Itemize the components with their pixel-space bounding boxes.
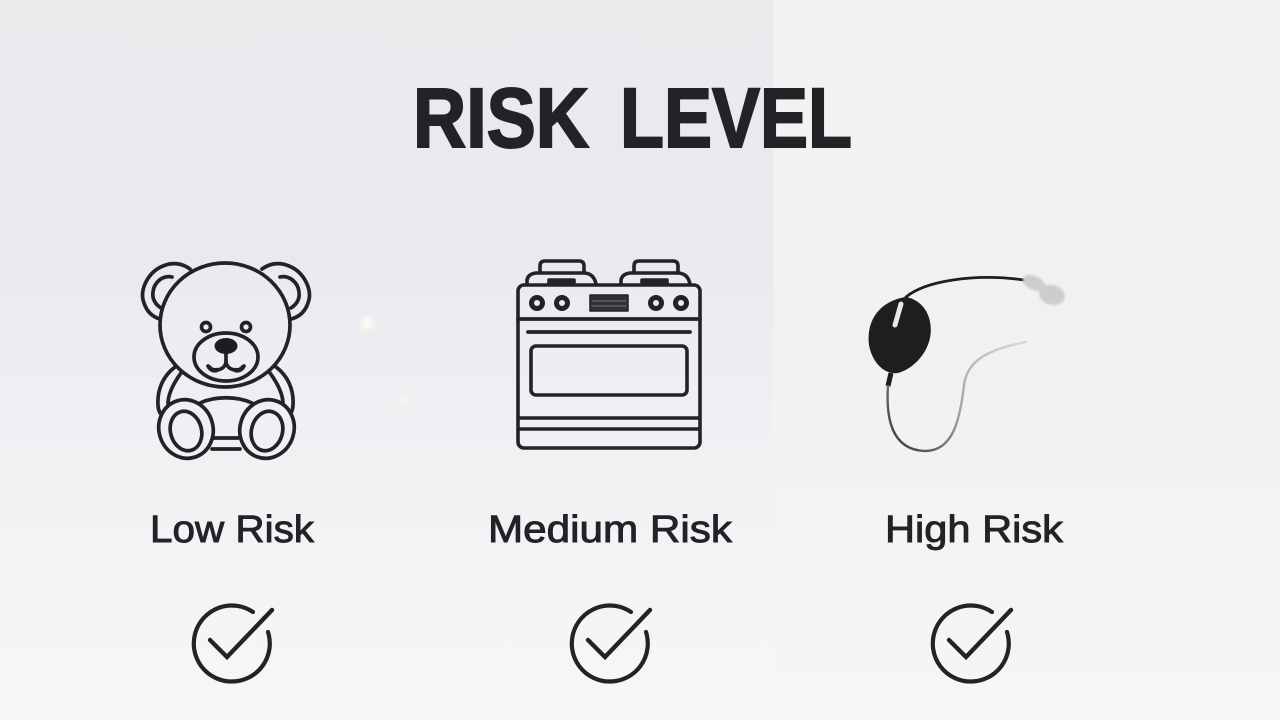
icon: hearing aid [869, 272, 1067, 451]
icon: teddy bear [143, 263, 309, 465]
column: low risk [143, 263, 315, 682]
icon: stove [518, 261, 700, 448]
background: light sparkle [361, 317, 409, 405]
label: low risk: Low Risk [150, 509, 315, 551]
icon: check mark [194, 606, 272, 682]
icon: check mark [933, 606, 1011, 682]
background: left panel [0, 0, 773, 720]
background: right panel [773, 0, 1280, 720]
title [413, 71, 852, 165]
label: high risk: High Risk [885, 509, 1064, 551]
icon: check mark [572, 606, 650, 682]
column: high risk [869, 272, 1067, 682]
column: medium risk [488, 261, 733, 682]
label: medium risk: Medium Risk [488, 509, 733, 551]
title: LEVEL [620, 71, 852, 165]
title: RISK [413, 71, 589, 165]
